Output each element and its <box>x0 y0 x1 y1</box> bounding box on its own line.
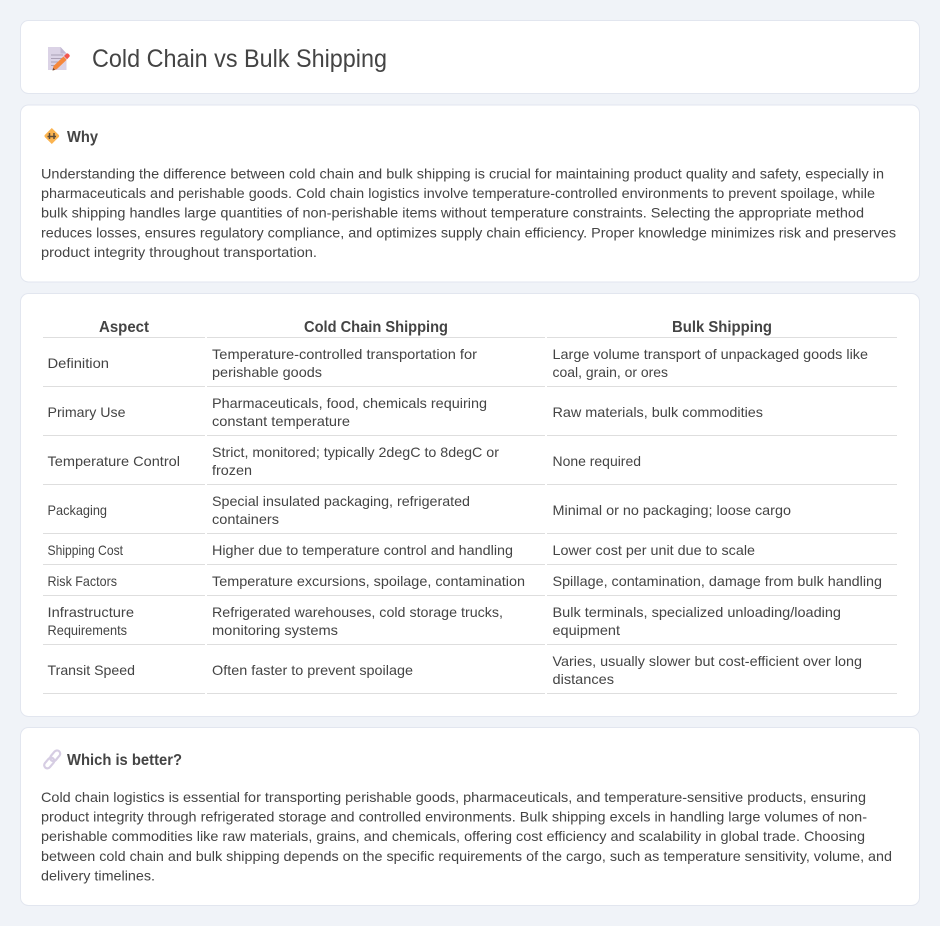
row: shipping cost <box>43 542 897 565</box>
text block: which is better paragraph: product integrity through refrigerated storage and controlled environments. Bulk shipping excels in handling large volumes of non- <box>41 809 867 825</box>
row: temperature control: None required <box>552 453 641 469</box>
row: primary use: Pharmaceuticals, food, chemicals requiring <box>212 395 487 411</box>
panel: title header <box>20 20 920 94</box>
text block: why paragraph: reduces losses, ensures regulatory compliance, and optimizes supply chain efficiency. Proper knowledge minimizes risk and preserves <box>41 224 896 240</box>
text block: why paragraph: product integrity throughout transportation. <box>41 244 317 260</box>
row: infrastructure requirements: Requirements <box>48 622 127 638</box>
row: primary use: Primary Use <box>48 404 126 420</box>
row: transit speed <box>43 653 897 694</box>
table header: Bulk Shipping <box>672 319 772 336</box>
row: infrastructure requirements: Bulk terminals, specialized unloading/loading <box>552 604 841 620</box>
row: shipping cost: Higher due to temperature control and handling <box>212 542 513 558</box>
row: transit speed: distances <box>552 671 614 687</box>
row: packaging: containers <box>212 511 279 527</box>
text block: which is better paragraph: between cold chain and bulk shipping depends on the specific requirements of the cargo, such as temperature sensitivity, volume, and <box>41 848 892 864</box>
table header <box>43 319 897 338</box>
row: temperature control: Temperature Control <box>48 453 180 469</box>
icon: link <box>43 749 62 770</box>
row: temperature control: frozen <box>212 462 252 478</box>
row: infrastructure requirements: Infrastructure <box>48 604 134 620</box>
row: definition: Large volume transport of unpackaged goods like <box>552 346 868 362</box>
row: risk factors: Spillage, contamination, damage from bulk handling <box>552 573 882 589</box>
row: infrastructure requirements: monitoring systems <box>212 622 338 638</box>
heading: why: Why <box>67 129 98 146</box>
table header: Cold Chain Shipping <box>304 319 448 336</box>
row: primary use: Raw materials, bulk commodities <box>552 404 763 420</box>
panel: comparison table <box>20 294 920 716</box>
row: definition: Definition <box>48 355 109 371</box>
row: definition <box>43 346 897 387</box>
panel: which is better <box>20 728 920 906</box>
text block: which is better paragraph: perishable commodities like raw materials, grains, and chemicals, offering cost efficiency and scalability in global trade. Choosing <box>41 828 865 844</box>
panel: why <box>20 105 920 282</box>
row: definition: coal, grain, or ores <box>552 364 668 380</box>
row: risk factors: Risk Factors <box>48 573 117 589</box>
icon: memo with pencil <box>48 47 70 70</box>
row: temperature control <box>43 444 897 485</box>
row: packaging: Special insulated packaging, refrigerated <box>212 493 470 509</box>
text block: why paragraph: pharmaceuticals and perishable goods. Cold chain logistics involve temperature-controlled environments to prevent spoilage, while <box>41 185 875 201</box>
row: risk factors <box>43 573 897 596</box>
row: definition: Temperature-controlled transportation for <box>212 346 477 362</box>
text block: which is better paragraph: Cold chain logistics is essential for transporting perishable goods, pharmaceuticals, and temperature-sensitive products, ensuring <box>41 789 866 805</box>
row: infrastructure requirements: equipment <box>552 622 620 638</box>
row: shipping cost: Shipping Cost <box>48 542 123 558</box>
text block: why paragraph: bulk shipping handles large quantities of non-perishable items without temperature constraints. Selecting the appropriate method <box>41 205 864 221</box>
title: Cold Chain vs Bulk Shipping <box>92 45 387 73</box>
row: packaging: Packaging <box>48 502 107 518</box>
text block: why paragraph: Understanding the difference between cold chain and bulk shipping is crucial for maintaining product quality and safety, especially in <box>41 166 884 182</box>
row: transit speed: Often faster to prevent spoilage <box>212 662 413 678</box>
row: packaging <box>43 493 897 534</box>
row: packaging: Minimal or no packaging; loose cargo <box>552 502 791 518</box>
table header: Aspect <box>99 319 149 336</box>
row: definition: perishable goods <box>212 364 322 380</box>
heading: which is better: Which is better? <box>67 752 182 769</box>
text block: which is better paragraph: delivery timelines. <box>41 867 155 883</box>
row: infrastructure requirements: Refrigerated warehouses, cold storage trucks, <box>212 604 503 620</box>
row: primary use <box>43 395 897 436</box>
row: transit speed: Transit Speed <box>48 662 135 678</box>
row: primary use: constant temperature <box>212 413 350 429</box>
row: transit speed: Varies, usually slower but cost-efficient over long <box>552 653 862 669</box>
row: infrastructure requirements <box>43 604 897 645</box>
row: shipping cost: Lower cost per unit due to scale <box>552 542 755 558</box>
row: risk factors: Temperature excursions, spoilage, contamination <box>212 573 525 589</box>
text block: why paragraph <box>41 166 896 260</box>
text block: which is better paragraph <box>41 789 892 883</box>
row: temperature control: Strict, monitored; typically 2degC to 8degC or <box>212 444 499 460</box>
icon: warning diamond <box>45 128 59 144</box>
